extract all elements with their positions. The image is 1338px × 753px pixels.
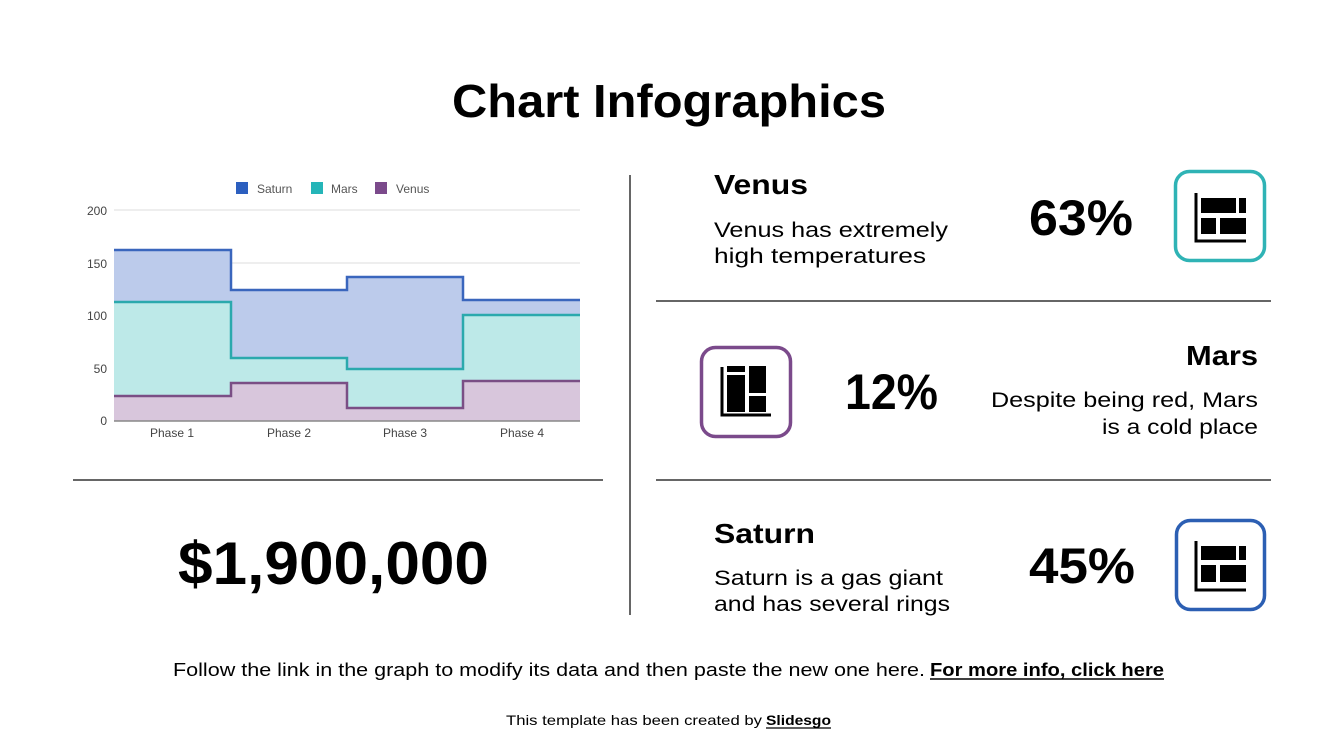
footer note: Follow the link in the graph to modify its data and then paste the new one here. [173, 660, 925, 680]
icon: teal chart [1176, 172, 1264, 260]
title: Chart Infographics [452, 75, 886, 127]
panel: saturn: Saturn [714, 518, 815, 549]
icon: blue chart [1176, 520, 1264, 610]
panel: venus: 63% [1029, 190, 1133, 246]
panel: saturn: and has several rings [714, 593, 950, 616]
mars area [114, 302, 580, 421]
x axis labels [150, 426, 544, 440]
panel: venus: Venus [714, 169, 808, 200]
footer note [173, 660, 1164, 680]
y axis labels: 200 [87, 204, 107, 218]
panel: mars: 12% [845, 364, 938, 420]
panel: mars: Despite being red, Mars [991, 389, 1258, 412]
panel: venus: high temperatures [714, 245, 926, 268]
panel: mars: Mars [1186, 340, 1258, 371]
chart: stepped area [87, 182, 580, 440]
y axis labels: 50 [94, 362, 107, 376]
x axis labels: Phase 3 [383, 426, 427, 440]
panel: mars [702, 340, 1258, 439]
y axis labels: 150 [87, 257, 107, 271]
credit: This template has been created by [506, 712, 762, 728]
chart legend: Mars [331, 182, 358, 196]
saturn area [114, 250, 580, 421]
chart legend [236, 182, 429, 196]
big number: $1,900,000 [178, 530, 489, 597]
chart legend: Saturn [257, 182, 292, 196]
x axis labels: Phase 1 [150, 426, 194, 440]
credit: Slidesgo [766, 712, 831, 728]
y axis labels: 0 [100, 414, 107, 428]
x axis labels: Phase 4 [500, 426, 544, 440]
icon: purple chart [702, 348, 790, 436]
footer note: For more info, click here [930, 660, 1164, 680]
panel: saturn [714, 518, 1264, 616]
panel: mars: is a cold place [1102, 416, 1258, 439]
y axis labels [87, 204, 107, 428]
panel: saturn: 45% [1029, 538, 1135, 594]
chart legend: Venus [396, 182, 429, 196]
venus area [114, 381, 580, 421]
panel: venus: Venus has extremely [714, 219, 949, 242]
x axis labels: Phase 2 [267, 426, 311, 440]
panel: venus [714, 169, 1264, 268]
y axis labels: 100 [87, 309, 107, 323]
panel: saturn: Saturn is a gas giant [714, 567, 943, 590]
credit [506, 712, 831, 728]
